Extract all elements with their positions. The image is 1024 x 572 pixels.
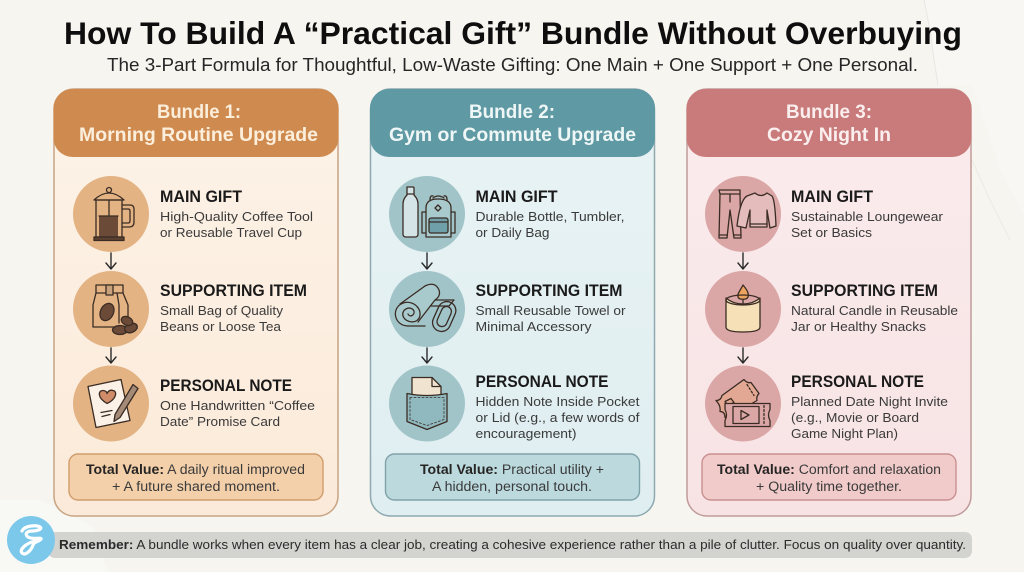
callout: remember bar [48, 532, 972, 558]
personal note text: Date” Promise Card [160, 414, 280, 429]
main gift text: Set or Basics [791, 225, 872, 240]
main gift text: MAIN GIFT [791, 187, 873, 206]
supporting item text: Jar or Healthy Snacks [791, 319, 926, 334]
bundle 3 header: Cozy Night In [767, 124, 891, 146]
arrow [738, 253, 748, 269]
personal note text: Hidden Note Inside Pocket [476, 394, 640, 409]
total value box [69, 454, 323, 500]
main gift text: or Daily Bag [476, 225, 550, 240]
arrow [106, 253, 116, 269]
panel: bundle 3 [686, 89, 972, 516]
callout: remember bar: Remember: A bundle works when every item has a clear job, creating a cohesive experience rather than a pile of clutter. Focus on quality over quantity. [59, 537, 966, 552]
main gift text: Sustainable Loungewear [791, 209, 944, 224]
bundle 2 header: Gym or Commute Upgrade [389, 124, 636, 146]
bundle 2 header: Bundle 2: [469, 101, 555, 123]
icon: coffee bag [73, 271, 149, 347]
bundle 1 header: Morning Routine Upgrade [79, 124, 318, 146]
supporting item text: SUPPORTING ITEM [476, 281, 622, 300]
supporting item text: Small Bag of Quality [160, 303, 283, 318]
panel: bundle 2 [370, 89, 655, 516]
icon: note in pocket [389, 366, 465, 442]
personal note text [160, 376, 315, 429]
arrow [422, 253, 432, 269]
personal note text: PERSONAL NOTE [791, 372, 924, 391]
personal note text: Planned Date Night Invite [791, 394, 948, 409]
supporting item text: SUPPORTING ITEM [160, 281, 307, 300]
main gift text [476, 187, 624, 240]
total value box: Total Value: A daily ritual improved [86, 462, 305, 477]
icon: candle [705, 271, 781, 347]
supporting item text: Small Reusable Towel or [476, 303, 626, 318]
supporting item text: Natural Candle in Reusable [791, 303, 958, 318]
supporting item text: SUPPORTING ITEM [791, 281, 938, 300]
bundle 1 header: Bundle 1: [157, 101, 241, 123]
icon: loungewear [705, 176, 781, 252]
personal note text: or Lid (e.g., a few words of [476, 410, 640, 425]
supporting item text [160, 281, 307, 334]
arrow [422, 348, 432, 363]
personal note text [791, 372, 948, 441]
main gift text: or Reusable Travel Cup [160, 225, 302, 240]
main gift text: Durable Bottle, Tumbler, [476, 209, 624, 224]
total value box: A hidden, personal touch. [432, 479, 592, 494]
main gift text: MAIN GIFT [476, 187, 558, 206]
supporting item text [791, 281, 958, 334]
personal note text: One Handwritten “Coffee [160, 398, 315, 413]
personal note text: PERSONAL NOTE [476, 372, 608, 391]
bundle 3 header [686, 89, 972, 157]
icon: note and pen [73, 366, 149, 442]
icon: towel and carabiner [389, 271, 465, 347]
main gift text [791, 187, 944, 240]
supporting item text: Minimal Accessory [476, 319, 592, 334]
personal note text: encouragement) [476, 426, 576, 441]
total value box: Total Value: Practical utility + [420, 462, 604, 477]
total value box [702, 454, 956, 500]
icon: bottle and backpack [389, 176, 465, 252]
icon: french press [73, 176, 149, 252]
personal note text: PERSONAL NOTE [160, 376, 292, 395]
arrow [106, 348, 116, 363]
personal note text [476, 372, 640, 441]
panel: bundle 1 [54, 89, 338, 516]
total value box [386, 454, 640, 500]
supporting item text [476, 281, 626, 334]
bundle 1 header [54, 89, 338, 157]
total value box: + Quality time together. [756, 479, 902, 494]
personal note text: Game Night Plan) [791, 426, 898, 441]
total value box: Total Value: Comfort and relaxation [717, 462, 941, 477]
main gift text: High-Quality Coffee Tool [160, 209, 313, 224]
personal note text: (e.g., Movie or Board [791, 410, 919, 425]
subtitle: The 3-Part Formula for Thoughtful, Low-Waste Gifting: One Main + One Support + One Personal. [107, 55, 918, 75]
icon: logo [7, 516, 55, 564]
total value box: + A future shared moment. [112, 479, 280, 494]
main gift text [160, 187, 313, 240]
title: How To Build A “Practical Gift” Bundle Without Overbuying [64, 15, 962, 51]
bundle 2 header [370, 89, 655, 157]
arrow [738, 348, 748, 363]
supporting item text: Beans or Loose Tea [160, 319, 282, 334]
icon: tickets [705, 366, 781, 442]
main gift text: MAIN GIFT [160, 187, 242, 206]
bundle 3 header: Bundle 3: [786, 101, 872, 123]
